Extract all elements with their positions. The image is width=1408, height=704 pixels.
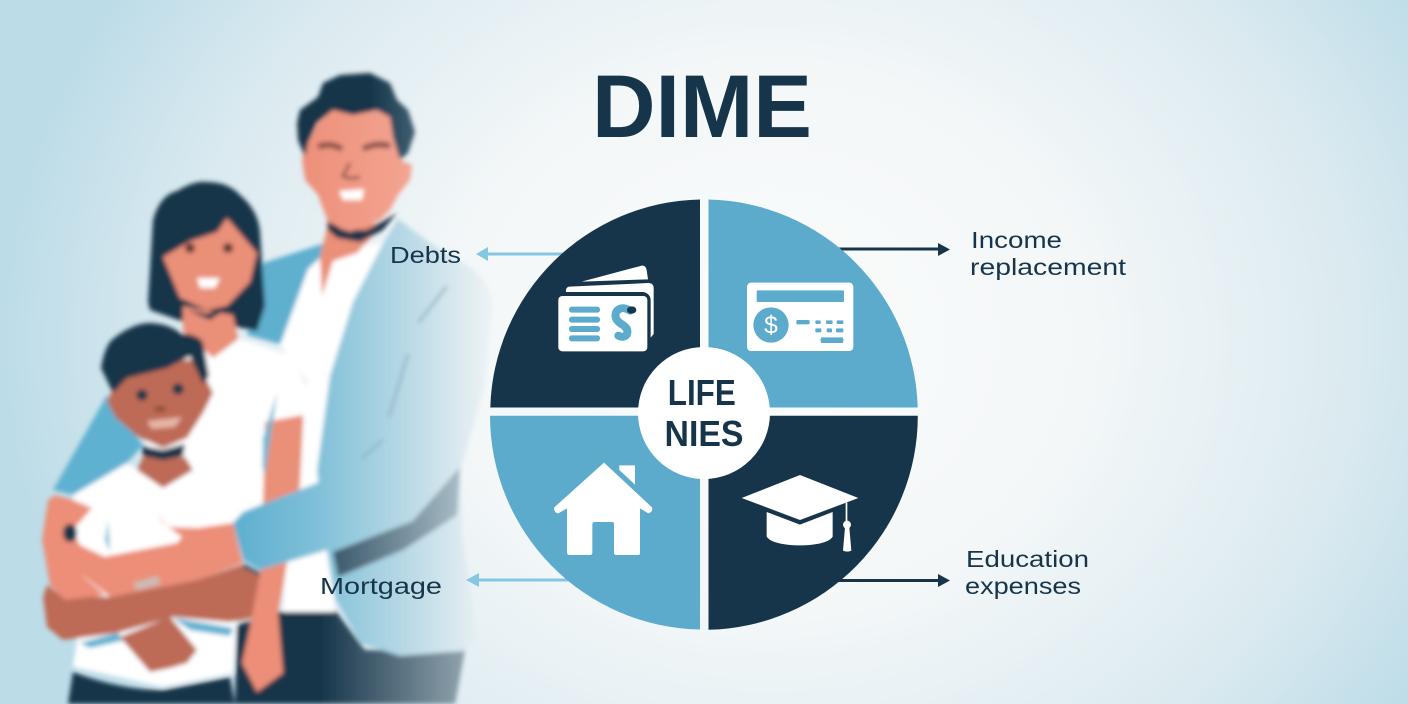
label: education expenses: expenses: [965, 573, 1081, 599]
man's shirt: [280, 243, 383, 612]
woman's neckline shadow: [187, 308, 227, 320]
woman's eyes: [185, 243, 233, 253]
child's hair: [101, 323, 209, 393]
label: debts: Debts: [390, 242, 461, 268]
woman's left hand: [42, 495, 105, 600]
man's smile: [339, 189, 364, 200]
child's t-shirt: [73, 440, 263, 687]
woman's lower hand repaint: [242, 563, 287, 692]
woman's arm sleeve behind child: [53, 395, 143, 495]
man's trousers: [235, 610, 465, 704]
woman's right arm: [242, 415, 303, 692]
man's hand: [80, 512, 243, 597]
arrow: mortgage: [466, 573, 576, 587]
man's neck: [320, 224, 383, 296]
woman's shirt: [140, 331, 312, 525]
man's back shoulder: [247, 243, 337, 345]
arrow: income replacement: [830, 243, 950, 256]
man's brows, eyes and nose: [318, 145, 390, 178]
woman's face: [163, 218, 257, 310]
icon: house: [554, 463, 652, 555]
segment: mortgage: [490, 416, 700, 630]
sleeve cuff: [243, 563, 260, 576]
woman's hair: [148, 182, 265, 331]
sleeve shadow: [258, 393, 277, 475]
icon: payment card: [747, 283, 853, 351]
pie chart: [490, 200, 918, 630]
icon: cash bills: [558, 266, 654, 351]
child's arm: [43, 565, 260, 640]
arrow: education expenses: [830, 574, 950, 587]
man's jacket: [317, 219, 493, 656]
woman's smile: [197, 278, 220, 288]
center label: LIFE: [668, 372, 736, 413]
center circle: [638, 347, 770, 479]
child's nose: [154, 406, 166, 412]
icons: [554, 266, 858, 555]
child's eyes: [136, 384, 184, 400]
segment: debts: [490, 200, 700, 408]
woman's neck: [183, 306, 238, 358]
man's face: [302, 110, 412, 232]
title: DIME: [592, 56, 812, 156]
segment: education: [708, 416, 918, 630]
jacket shadow: [333, 467, 460, 577]
label: income replacement: Income: [971, 227, 1062, 253]
child's face: [107, 360, 213, 448]
child's hand: [120, 617, 197, 672]
icon: graduation cap: [742, 475, 858, 552]
child's trousers: [68, 672, 235, 704]
illustration: blurred family: [42, 73, 493, 704]
label: income replacement: replacement: [970, 254, 1127, 280]
child's smile: [147, 417, 182, 429]
crease in t-shirt: [105, 520, 110, 552]
child's collar: [142, 444, 185, 460]
center label: NIES: [664, 413, 744, 454]
man's hair: [297, 73, 415, 160]
segment: income: [708, 200, 918, 408]
label: mortgage: Mortgage: [320, 573, 442, 599]
arrow: debts: [476, 247, 564, 261]
highlights on hand: [133, 576, 160, 590]
label: education expenses: Education: [966, 546, 1089, 572]
child's lower blue bands: [80, 618, 233, 648]
icon: payment card: $: [764, 313, 778, 340]
jacket folds: [362, 286, 447, 458]
wristwatch spot: [63, 524, 77, 542]
child's neck: [137, 457, 193, 488]
man's collar: [327, 213, 397, 242]
man's sleeve: [233, 420, 470, 570]
